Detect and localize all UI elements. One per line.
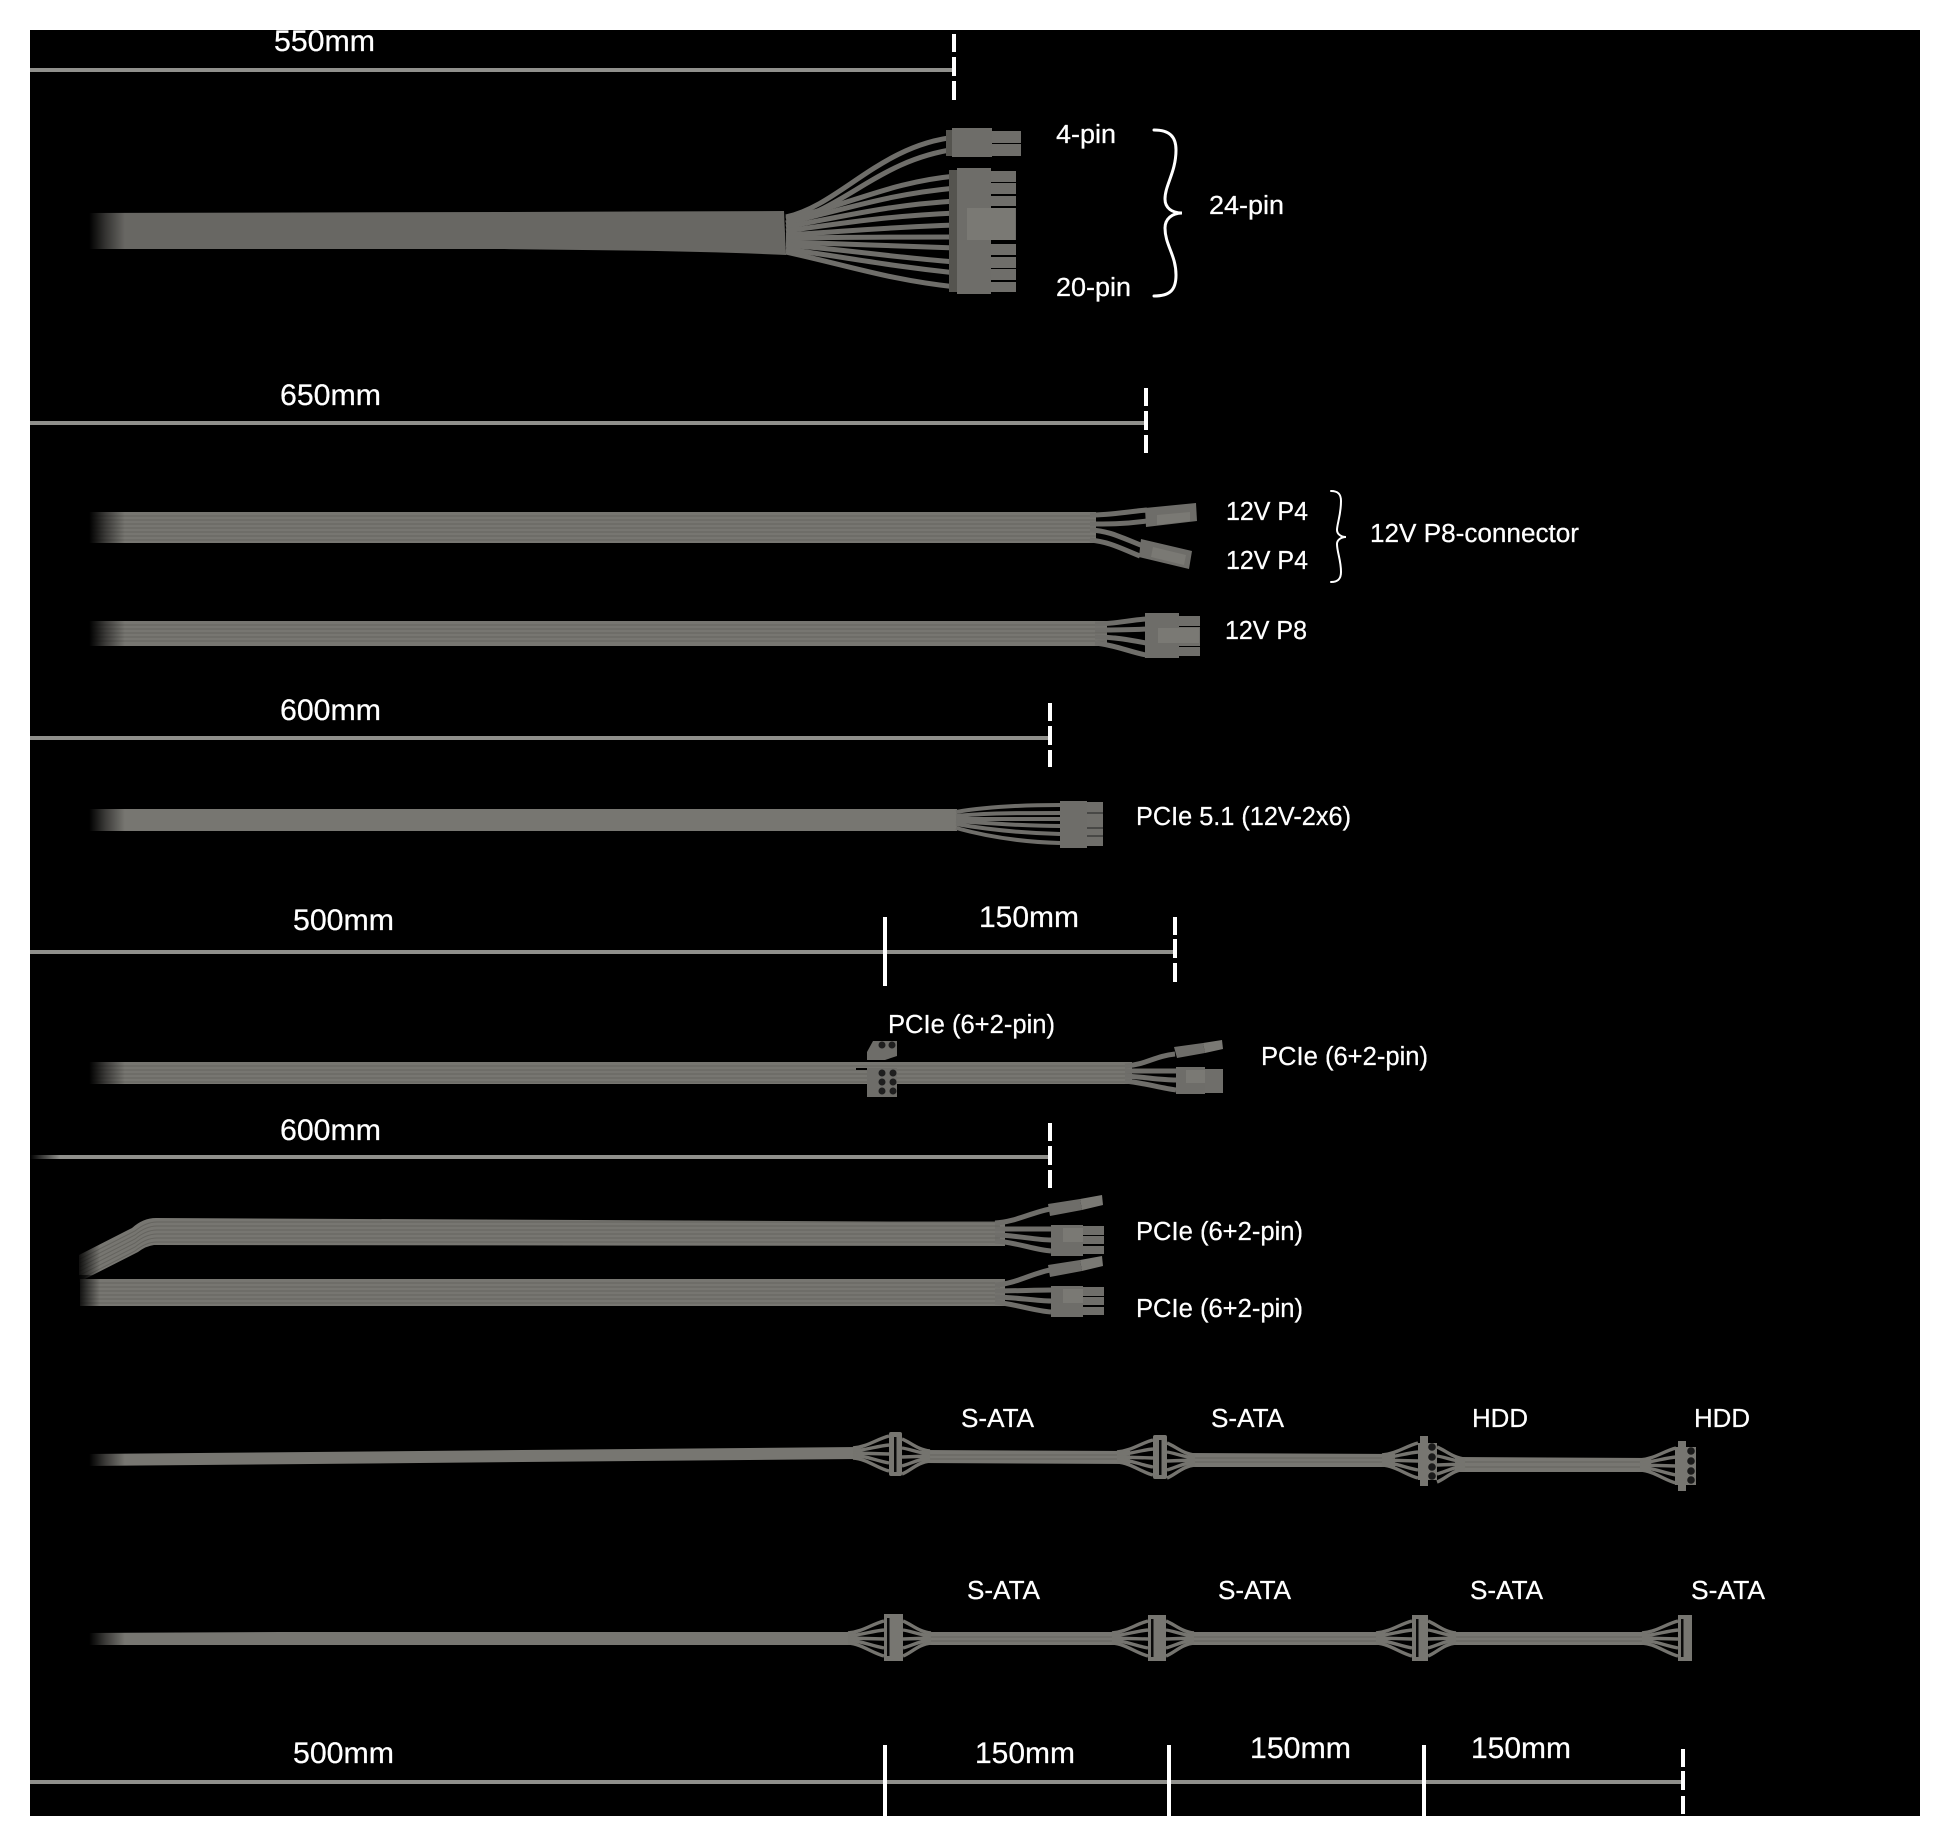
label: PCIe 5.1: PCIe 5.1 (12V-2x6) (1136, 803, 1351, 831)
ruler: 600mm (PCIe 5.1): 600mm (280, 694, 381, 727)
labels: S-ATA / HDD chain (961, 1405, 1750, 1433)
labels: 12V P4 (1226, 498, 1308, 575)
ruler: 600mm (PCIe pair) (30, 1114, 1050, 1188)
labels: S-ATA chain: S-ATA (1218, 1577, 1291, 1605)
connector: S-ATA c (1412, 1615, 1428, 1661)
cable: S-ATA / HDD chain (60, 1432, 1696, 1491)
cable: 12V P8 (60, 613, 1200, 658)
labels: PCIe daisy chain: PCIe (6+2-pin) (1261, 1043, 1428, 1071)
brace: 24-pin (1154, 130, 1182, 296)
connector: S-ATA 2 (1153, 1435, 1167, 1479)
ruler: 500mm + 150mm: 150mm (979, 901, 1079, 934)
labels: PCIe pair: PCIe (6+2-pin) (1136, 1218, 1303, 1246)
labels: S-ATA / HDD chain: HDD (1694, 1405, 1750, 1433)
connector: 12V P4 lower (1139, 539, 1192, 569)
labels: S-ATA chain (967, 1577, 1765, 1605)
connector: S-ATA a (884, 1614, 903, 1661)
cable: split 12V P4 (60, 503, 1197, 569)
ruler: 500mm + 150mm: 500mm (293, 904, 394, 937)
connector: S-ATA b (1148, 1615, 1166, 1661)
ruler: 500mm + 150mm x3: 150mm (1471, 1732, 1571, 1765)
brace: 12V P8-connector (1331, 491, 1346, 582)
ruler: 500mm + 150mm x3: 150mm (1250, 1732, 1351, 1765)
labels: 24-pin group (1056, 121, 1284, 302)
labels: S-ATA / HDD chain: HDD (1472, 1405, 1528, 1433)
labels: 24-pin group: 20-pin (1056, 274, 1131, 302)
labels: PCIe daisy chain: PCIe (6+2-pin) (888, 1011, 1055, 1039)
labels: S-ATA chain: S-ATA (967, 1577, 1040, 1605)
connector: 12V P8 (1145, 613, 1200, 658)
label: 12V P8: 12V P8 (1225, 617, 1307, 645)
labels: S-ATA chain: S-ATA (1470, 1577, 1543, 1605)
connector: mid-cable PCIe (856, 1041, 897, 1097)
connector: 20-pin (949, 168, 1016, 294)
connector: large upper (1051, 1225, 1104, 1256)
cable: PCIe upper bent (76, 1195, 1104, 1284)
cable: PCIe daisy chain (60, 1040, 1223, 1097)
connector: HDD 1 (1418, 1436, 1437, 1486)
labels: PCIe pair (1136, 1218, 1303, 1323)
connector: small lower (1048, 1256, 1103, 1277)
labels: PCIe pair: PCIe (6+2-pin) (1136, 1295, 1303, 1323)
connector: large lower (1051, 1286, 1104, 1317)
label: 12V P8-connector: 12V P8-connector (1370, 520, 1580, 548)
connector: HDD 2 (1675, 1441, 1696, 1491)
ruler: 500mm + 150mm x3 (30, 1732, 1683, 1816)
labels: S-ATA chain: S-ATA (1691, 1577, 1765, 1605)
connector: S-ATA 1 (889, 1432, 902, 1476)
connector: 12V-2x6 (1060, 801, 1103, 848)
labels: 12V P4: 12V P4 (1226, 547, 1308, 575)
labels: PCIe daisy chain (888, 1011, 1428, 1071)
ruler: 550mm: 550mm (274, 25, 375, 58)
cable: 24-pin ATX (60, 128, 1021, 294)
ruler: 500mm + 150mm (30, 901, 1175, 986)
labels: S-ATA / HDD chain: S-ATA (1211, 1405, 1284, 1433)
connector: end small (1174, 1040, 1223, 1058)
connector: small upper (1048, 1195, 1103, 1216)
ruler: 650mm: 650mm (280, 379, 381, 412)
ruler: 600mm (PCIe pair): 600mm (280, 1114, 381, 1147)
ruler: 500mm + 150mm x3: 150mm (975, 1737, 1075, 1770)
labels: 24-pin group: 24-pin (1209, 192, 1284, 220)
cable: S-ATA chain (60, 1614, 1692, 1661)
connector: 12V P4 upper (1145, 503, 1197, 527)
cable: PCIe 5.1 (60, 801, 1103, 848)
labels: S-ATA / HDD chain: S-ATA (961, 1405, 1034, 1433)
labels: 24-pin group: 4-pin (1056, 121, 1116, 149)
connector: S-ATA d (1678, 1615, 1692, 1661)
labels: 12V P4: 12V P4 (1226, 498, 1308, 526)
connector: end large (1176, 1067, 1223, 1094)
cable: PCIe lower (76, 1256, 1104, 1317)
connector: 4-pin (946, 128, 1021, 157)
ruler: 500mm + 150mm x3: 500mm (293, 1737, 394, 1770)
